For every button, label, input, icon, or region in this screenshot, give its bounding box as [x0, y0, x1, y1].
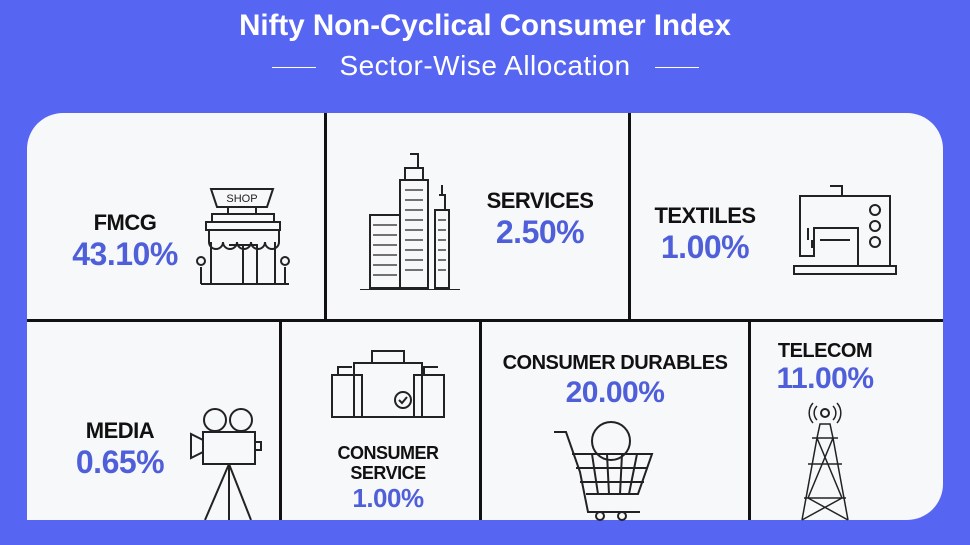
- icon: cart: [554, 421, 654, 521]
- cell: media: MEDIA: [86, 418, 154, 443]
- cell: consumer service: CONSUMER: [337, 443, 438, 463]
- cell: textiles: TEXTILES: [654, 203, 756, 228]
- panel: grid: [27, 113, 943, 520]
- title: Nifty Non-Cyclical Consumer Index: [239, 9, 731, 42]
- cell: services: 2.50%: [496, 214, 584, 250]
- cell: consumer service: [337, 443, 439, 513]
- icon: shop: SHOP: [226, 193, 258, 205]
- cell: media: 0.65%: [76, 444, 164, 480]
- cell: consumer durables: 20.00%: [566, 376, 664, 409]
- icon: camera: [190, 408, 262, 520]
- subtitle: Sector-Wise Allocation: [339, 50, 631, 81]
- cell: telecom: [776, 340, 874, 395]
- icon: buildings: [360, 153, 460, 290]
- cell: consumer durables: [503, 352, 728, 409]
- cell: consumer durables: CONSUMER DURABLES: [503, 352, 727, 374]
- icon: sewing machine: [793, 185, 897, 275]
- icon: tower: [801, 402, 849, 521]
- cell: consumer service: SERVICE: [350, 463, 426, 483]
- cell: telecom: TELECOM: [778, 340, 872, 362]
- icon: shop: [196, 188, 290, 285]
- cell: telecom: 11.00%: [776, 362, 874, 395]
- cell: textiles: 1.00%: [661, 229, 749, 265]
- icon: shopping bags: [331, 350, 445, 418]
- cell: services: [487, 188, 594, 250]
- cell: FMCG: FMCG: [94, 210, 156, 235]
- cell: consumer service: 1.00%: [352, 483, 424, 513]
- cell: media: [76, 418, 164, 480]
- cell: services: SERVICES: [487, 188, 593, 213]
- cell: FMCG: 43.10%: [72, 236, 178, 272]
- cell: FMCG: [72, 210, 178, 272]
- cell: textiles: [654, 203, 756, 265]
